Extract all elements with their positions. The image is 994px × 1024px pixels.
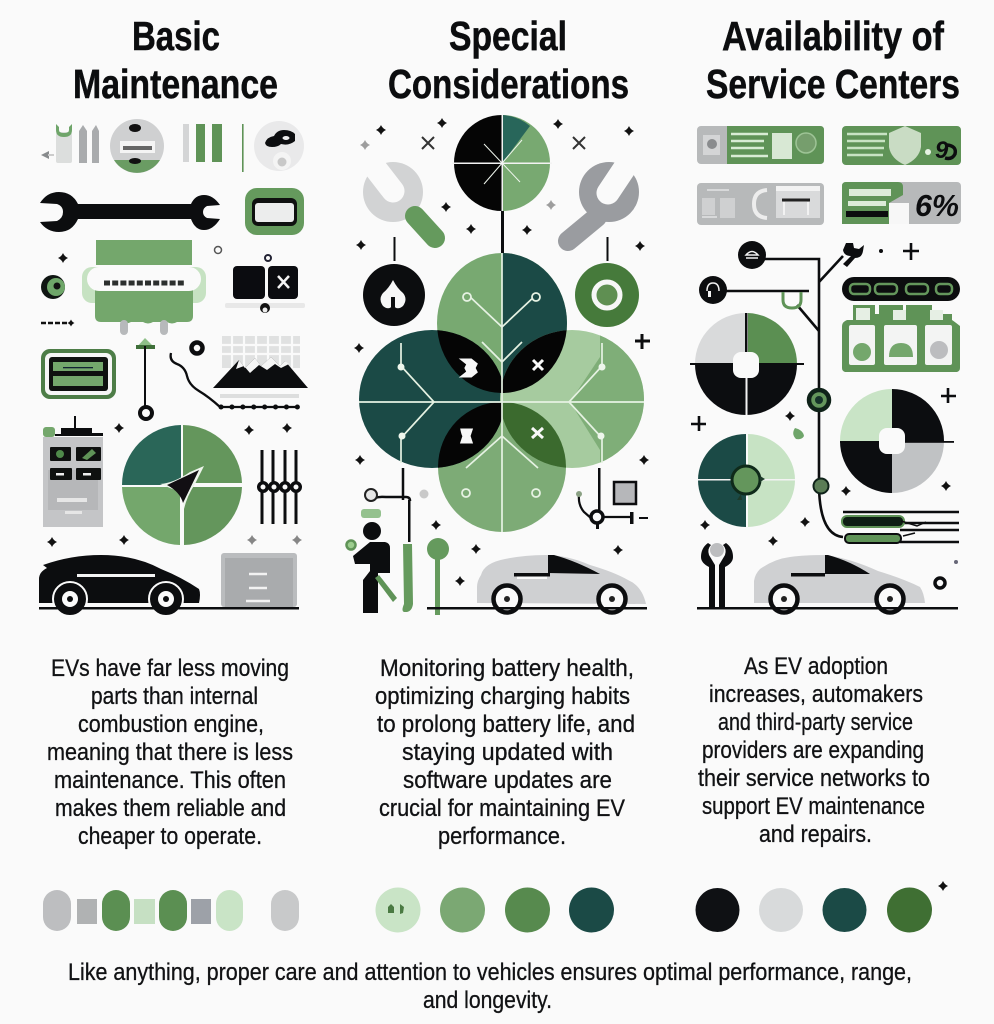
text block: service centers [698,653,930,848]
icon: battery module [82,240,206,335]
ground line [39,607,299,610]
petal: right [500,330,650,470]
text block: special considerations: crucial for maintaining EV [379,795,625,822]
icon: light wrench [363,160,435,238]
palette: basic maintenance swatches [43,890,299,931]
text block: basic maintenance: EVs have far less moving [51,655,289,682]
illustration panel: special considerations [346,115,650,615]
text block: special considerations: optimizing charging habits [375,683,630,710]
illustration panel: availability of service centers [690,126,961,612]
text block: special considerations: performance. [438,823,566,850]
card: service info two: 9 [935,137,949,164]
chart: pie three [698,434,795,527]
chart: pie one [690,313,804,415]
column heading: Basic Maintenance: Basic [132,13,220,59]
text block: basic maintenance [47,655,293,850]
icon: battery cabinet [43,416,103,527]
footer statement [68,959,912,1014]
chart: pie two [840,389,954,493]
footer statement: Like anything, proper care and attention to vehicles ensures optimal performance, range, [68,959,912,986]
icon: green ring disc [575,237,639,327]
icon: top segmented circle [452,115,552,211]
text block: service centers: their service networks to [698,765,930,792]
text block: service centers: and repairs. [759,821,872,848]
connector line [501,211,504,253]
footer statement: and longevity. [423,987,552,1014]
icon: node headset [699,276,727,304]
card: 6% statistic: 6% [915,188,959,223]
petal: top [437,253,567,380]
decorative stars: service centers [691,388,958,588]
text block: service centers: As EV adoption [744,653,888,680]
column heading: Special Considerations [388,13,629,107]
icon: long black wrench [40,192,220,232]
circuit nodes [401,293,602,497]
icon: vertical bars [183,124,244,172]
petal: left [359,330,505,468]
text block: basic maintenance: maintenance. This often [54,767,286,794]
icon: green target ring with dashes [41,253,74,326]
text block: special considerations: software updates are [403,767,612,794]
palette: special considerations swatches [376,888,614,932]
icon: wavy cable with dots [171,342,298,407]
card: 6% statistic [842,182,961,224]
text block: special considerations [375,655,635,850]
icon: black flame disc [363,237,425,326]
icon: technician with tool [346,468,413,613]
icon: mountains over grid [213,336,308,398]
icon: standing wrench tool [701,543,733,608]
icon: connector nodes [793,390,829,494]
palette: service centers swatches [696,881,948,932]
icon: slider controls [262,450,296,524]
text block: service centers: providers are expanding [702,737,924,764]
icon: green device button [245,188,304,235]
text block: service centers: increases, automakers [709,681,923,708]
connector network [713,256,843,537]
column heading: Special Considerations: Considerations [388,61,629,107]
text block: basic maintenance: parts than internal [91,683,258,710]
chart: four-petal venn diagram [359,250,650,532]
text block: special considerations: staying updated with [402,739,613,766]
icon: silver car [477,555,646,612]
text block: special considerations: to prolong battery life, and [377,711,635,738]
icon: green bottles panel [842,305,960,372]
column heading: Availability of Service Centers: Availability of [722,13,944,59]
icon: silver car [754,555,925,612]
illustration panel: basic maintenance [39,119,308,616]
column heading: Basic Maintenance: Maintenance [73,61,278,107]
text block: basic maintenance: combustion engine, [78,711,264,738]
card: service info two [842,126,961,165]
ground line [697,607,958,610]
overlap glyphs [462,360,543,442]
petal: bottom [438,402,566,532]
decorative stars: basic maintenance [47,423,302,547]
icon: green pin [427,538,449,615]
card: service info three [697,183,824,225]
icon: pin probe [136,338,155,419]
icon: round gauge [110,119,164,173]
icon: black car [39,555,200,616]
overlaps [437,330,567,468]
text block: special considerations: Monitoring battery health, [380,655,634,682]
icon: grey wrench [568,160,639,241]
chart: compass pie [122,425,242,545]
icon: open book [214,246,305,313]
text block: service centers: and third-party service [718,709,913,736]
icon: black connector bar [842,277,960,301]
icon: small tools row [41,124,99,163]
column heading: Special Considerations: Special [449,13,567,59]
text block: service centers: support EV maintenance [702,793,925,820]
icon: node hat [738,241,766,269]
text block: basic maintenance: meaning that there is less [47,739,293,766]
icon: cable bundle [842,512,959,543]
ground line [427,607,647,610]
icon: grey charging unit [221,553,297,607]
icon: plus and dot [879,243,919,260]
card: service info one [697,126,824,164]
decorative stars: special considerations [354,118,650,586]
circuit lines [359,253,644,532]
icon: plug with cable [420,468,648,529]
icon: grey disc with black blob [254,121,304,171]
text block: basic maintenance: makes them reliable and [55,795,286,822]
column heading: Availability of Service Centers [706,13,960,107]
icon: green display panel [41,349,116,399]
column heading: Basic Maintenance [73,13,278,107]
text block: basic maintenance: cheaper to operate. [78,823,262,850]
icon: small wrench [843,243,864,267]
